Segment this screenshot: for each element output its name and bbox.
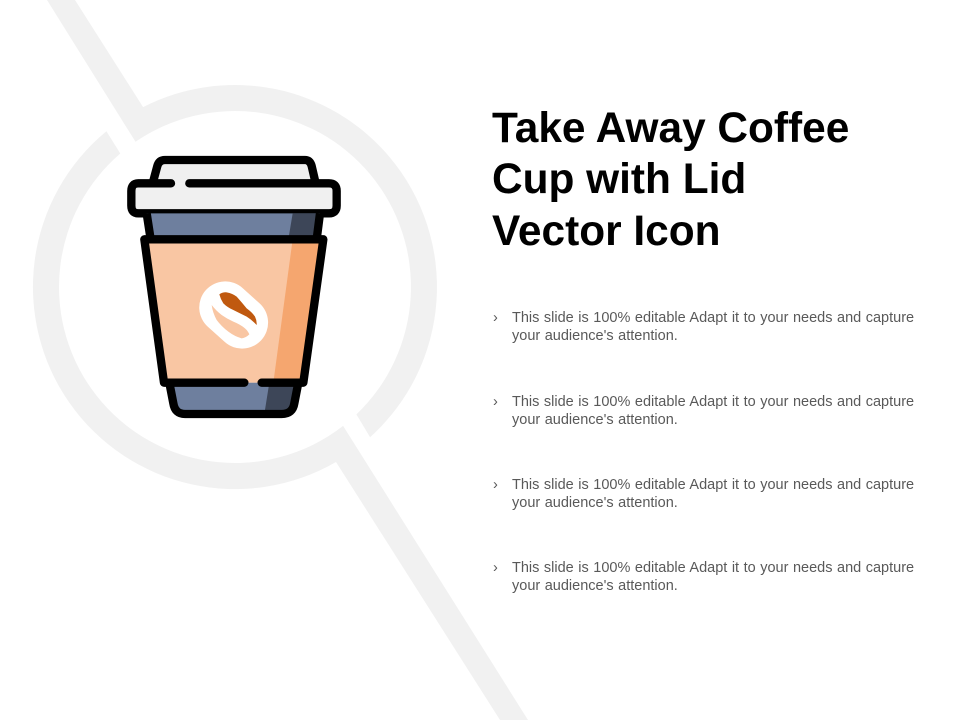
bullet text 1 [493,310,914,344]
title: Vector Icon [492,207,721,254]
bullet text 4: This slide is 100% editable Adapt it to your needs and capture [512,560,914,576]
cup lid brim [131,183,337,213]
icon: take away coffee cup [131,160,337,414]
title: Cup with Lid [492,155,746,202]
bullet text 2: your audience's attention. [512,412,678,428]
cup lower band [169,383,298,414]
bullet text 1: your audience's attention. [512,328,678,344]
title [492,104,849,254]
bullet text 3 [493,477,914,511]
bullet text 2: › [493,394,498,410]
cup lid top [153,160,316,183]
bullet text 2: This slide is 100% editable Adapt it to your needs and capture [512,394,914,410]
bullet text 1: › [493,310,498,326]
bullet text 4: › [493,560,498,576]
icon: coffee bean [189,271,279,359]
bullet text 1: This slide is 100% editable Adapt it to your needs and capture [512,310,914,326]
bullet text 4: your audience's attention. [512,578,678,594]
bullet text 3: › [493,477,498,493]
bullet text 4 [493,560,914,594]
cup sleeve [144,239,323,383]
cup upper band [147,213,320,239]
bullet text 3: your audience's attention. [512,495,678,511]
title: Take Away Coffee [492,104,849,151]
bullet text 3: This slide is 100% editable Adapt it to your needs and capture [512,477,914,493]
bullet text 2 [493,394,914,428]
